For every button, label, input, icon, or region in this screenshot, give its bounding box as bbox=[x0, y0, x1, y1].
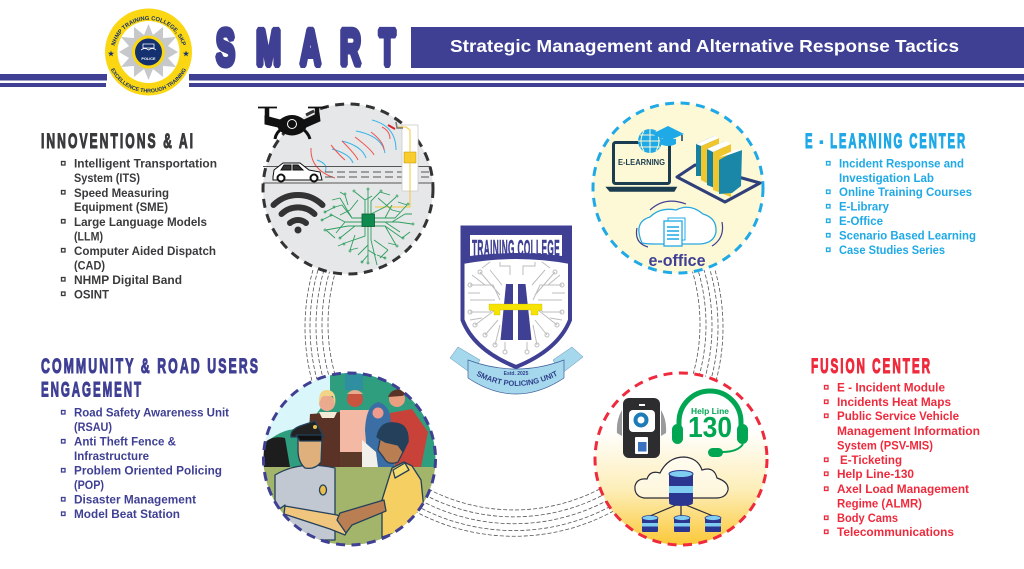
list: community: Infrastructure bbox=[74, 449, 149, 463]
icon: cloud database bbox=[635, 457, 728, 532]
list: fusion: Regime (ALMR) bbox=[837, 496, 922, 510]
figure: civilian bbox=[337, 423, 424, 537]
circle: e-learning illustration bbox=[593, 103, 763, 273]
list: innovations: System (ITS) bbox=[74, 171, 140, 185]
central shield emblem bbox=[450, 226, 583, 394]
shield bbox=[462, 228, 570, 367]
panel: innovations & AI bbox=[41, 130, 217, 302]
list: community bbox=[62, 406, 229, 521]
list: fusion: Telecommunications bbox=[837, 525, 954, 539]
list: community: Disaster Management bbox=[74, 492, 196, 506]
college badge logo: POLICE bbox=[141, 57, 156, 61]
list: fusion: Incidents Heat Maps bbox=[837, 395, 951, 409]
college badge logo: ★ bbox=[108, 50, 115, 58]
icon: cloud with documents bbox=[636, 201, 723, 247]
ribbon text: SMART POLICING UNIT bbox=[476, 370, 556, 386]
figure: police officer bbox=[275, 421, 352, 540]
established date: Estd. 2025 bbox=[504, 371, 529, 377]
list: fusion: Public Service Vehicle bbox=[837, 409, 959, 423]
list: fusion: Body Cams bbox=[837, 511, 898, 525]
title: SMART: S bbox=[216, 19, 235, 76]
icon: body camera bbox=[617, 398, 666, 458]
college badge logo: ★ bbox=[183, 50, 190, 58]
icon: car bbox=[273, 163, 322, 182]
list: community: (RSAU) bbox=[74, 420, 112, 434]
list: fusion: Help Line-130 bbox=[837, 467, 914, 481]
circle: community illustration bbox=[263, 373, 437, 547]
icon: laptop bbox=[607, 142, 676, 191]
list: e-learning: Investigation Lab bbox=[839, 171, 934, 185]
list: innovations: (CAD) bbox=[74, 258, 105, 272]
title: SMART: M bbox=[256, 19, 281, 76]
list: innovations: NHMP Digital Band bbox=[74, 273, 182, 287]
list: e-learning: Scenario Based Learning bbox=[839, 228, 976, 242]
icon: help line 130 headset bbox=[672, 391, 748, 457]
title banner bbox=[411, 27, 1024, 68]
icon: road bbox=[263, 166, 431, 183]
college badge logo: NHMP TRAINING COLLEGE, SKP bbox=[111, 16, 186, 46]
circuit traces bbox=[468, 262, 565, 354]
list: fusion: Axel Load Management bbox=[837, 482, 969, 496]
title: SMART: T bbox=[379, 19, 396, 76]
list: e-learning bbox=[826, 156, 976, 257]
list: community: Anti Theft Fence & bbox=[74, 434, 176, 448]
title: SMART: A bbox=[300, 19, 321, 76]
icon: help line 130 headset: Help Line bbox=[691, 406, 729, 416]
title: SMART bbox=[216, 19, 396, 76]
heading: fusion: FUSION CENTER bbox=[811, 355, 932, 378]
list: e-learning: E-Office bbox=[839, 214, 883, 228]
list: e-learning: Case Studies Series bbox=[839, 243, 945, 257]
list: innovations bbox=[62, 156, 217, 302]
group: people in background bbox=[307, 389, 428, 467]
panel: community & road users engagement bbox=[41, 355, 260, 521]
panel: e-learning center bbox=[805, 130, 976, 257]
panel: fusion center bbox=[811, 355, 980, 539]
label: e-office: e-office bbox=[648, 251, 706, 270]
icon: laptop: E-LEARNING bbox=[618, 158, 665, 167]
list: community: Road Safety Awareness Unit bbox=[74, 406, 229, 420]
list: community: (POP) bbox=[74, 478, 104, 492]
ribbon bbox=[450, 347, 583, 374]
list: innovations: Computer Aided Dispatch bbox=[74, 244, 216, 258]
heading: community: ENGAGEMENT bbox=[41, 378, 143, 402]
road bbox=[500, 284, 532, 340]
list: innovations: Speed Measuring bbox=[74, 186, 169, 200]
list: innovations: Intelligent Transportation bbox=[74, 156, 217, 170]
list: fusion: Management Information bbox=[837, 424, 980, 438]
college badge logo bbox=[105, 8, 192, 96]
list: e-learning: E-Library bbox=[839, 200, 889, 214]
list: community: Model Beat Station bbox=[74, 507, 180, 521]
title banner: Strategic Management and Alternative Response Tactics bbox=[450, 36, 959, 56]
heading: community bbox=[41, 355, 260, 402]
list: innovations: Large Language Models bbox=[74, 215, 207, 229]
list: innovations: (LLM) bbox=[74, 230, 103, 244]
icon: globe and graduation cap bbox=[638, 126, 684, 153]
icon: AI brain circuit bbox=[321, 188, 414, 265]
icon: drone bbox=[258, 108, 327, 139]
college badge logo: EXCELLENCE THROUGH TRAINING bbox=[111, 68, 186, 92]
header rule lines bbox=[0, 74, 1024, 87]
icon: help line 130 headset: 130 bbox=[688, 412, 732, 444]
heading: innovations: INNOVENTIONS & AI bbox=[41, 130, 195, 153]
list: fusion bbox=[824, 380, 980, 539]
heading: community: COMMUNITY & ROAD USERS bbox=[41, 355, 260, 378]
list: innovations: OSINT bbox=[74, 288, 110, 302]
title: SMART: R bbox=[340, 19, 361, 76]
list: e-learning: Online Training Courses bbox=[839, 185, 972, 199]
list: e-learning: Incident Response and bbox=[839, 156, 964, 170]
list: fusion: System (PSV-MIS) bbox=[837, 438, 933, 452]
icon: wifi bbox=[274, 195, 322, 234]
list: community: Problem Oriented Policing bbox=[74, 464, 222, 478]
list: fusion: E-Ticketing bbox=[840, 453, 902, 467]
icon: radar waves bbox=[311, 120, 396, 178]
circle: fusion center illustration bbox=[595, 373, 767, 545]
dashed connector ring bbox=[305, 270, 723, 536]
ribbon band bbox=[468, 360, 564, 394]
list: innovations: Equipment (SME) bbox=[74, 200, 168, 214]
icon: roadside sensor pole bbox=[375, 122, 418, 207]
icon: books on tablet bbox=[677, 136, 760, 202]
circle: technology illustration bbox=[258, 104, 433, 274]
text: TRAINING COLLEGE bbox=[472, 235, 560, 261]
bridge bbox=[489, 304, 542, 315]
list: fusion: E - Incident Module bbox=[837, 380, 945, 394]
